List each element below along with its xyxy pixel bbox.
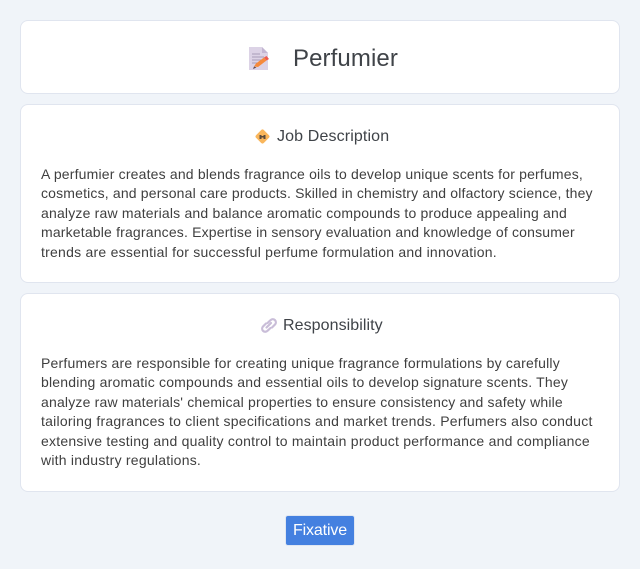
text: job description body: A perfumier creates and blends fragrance oils to develop unique scents for perfumes, — [41, 166, 583, 182]
button: Fixative: Fixative — [293, 522, 347, 539]
text: responsibility body: analyze raw materials' chemical properties to ensure consistency and safety while — [41, 394, 563, 410]
text: job description body — [41, 166, 593, 260]
icon: document with pencil — [249, 47, 269, 70]
button: Fixative — [285, 515, 355, 546]
text: job description body: trends are essential for successful perfume formulation and innovation. — [41, 244, 497, 260]
heading: Perfumier: Perfumier — [293, 45, 398, 72]
panel: responsibility — [20, 293, 620, 492]
text: responsibility body: with industry regulations. — [41, 452, 201, 468]
text: job description body: analyze raw materials and balance aromatic compounds to produce appealing and — [41, 205, 567, 221]
text: job description body: marketable fragrances. Expertise in sensory evaluation and knowledge of consumer — [41, 224, 575, 240]
panel: title card — [20, 20, 620, 94]
text: responsibility body — [41, 355, 593, 468]
heading: Job Description: Job Description — [277, 128, 389, 145]
text: responsibility body: extensive testing and quality control to maintain product performance and compliance — [41, 433, 590, 449]
text: job description body: cosmetics, and personal care products. Skilled in chemistry and olfactory science, they — [41, 185, 593, 201]
text: responsibility body: blending aromatic compounds and essential oils to develop signature scents. They — [41, 374, 568, 390]
text: responsibility body: Perfumers are responsible for creating unique fragrance formulations by carefully — [41, 355, 560, 371]
text: responsibility body: tailoring fragrances to client specifications and market trends. Perfumers also conduct — [41, 413, 593, 429]
icon: chain link — [261, 318, 277, 333]
heading: Responsibility: Responsibility — [283, 317, 383, 334]
icon: diamond sign — [256, 129, 270, 144]
panel: job description — [20, 104, 620, 283]
